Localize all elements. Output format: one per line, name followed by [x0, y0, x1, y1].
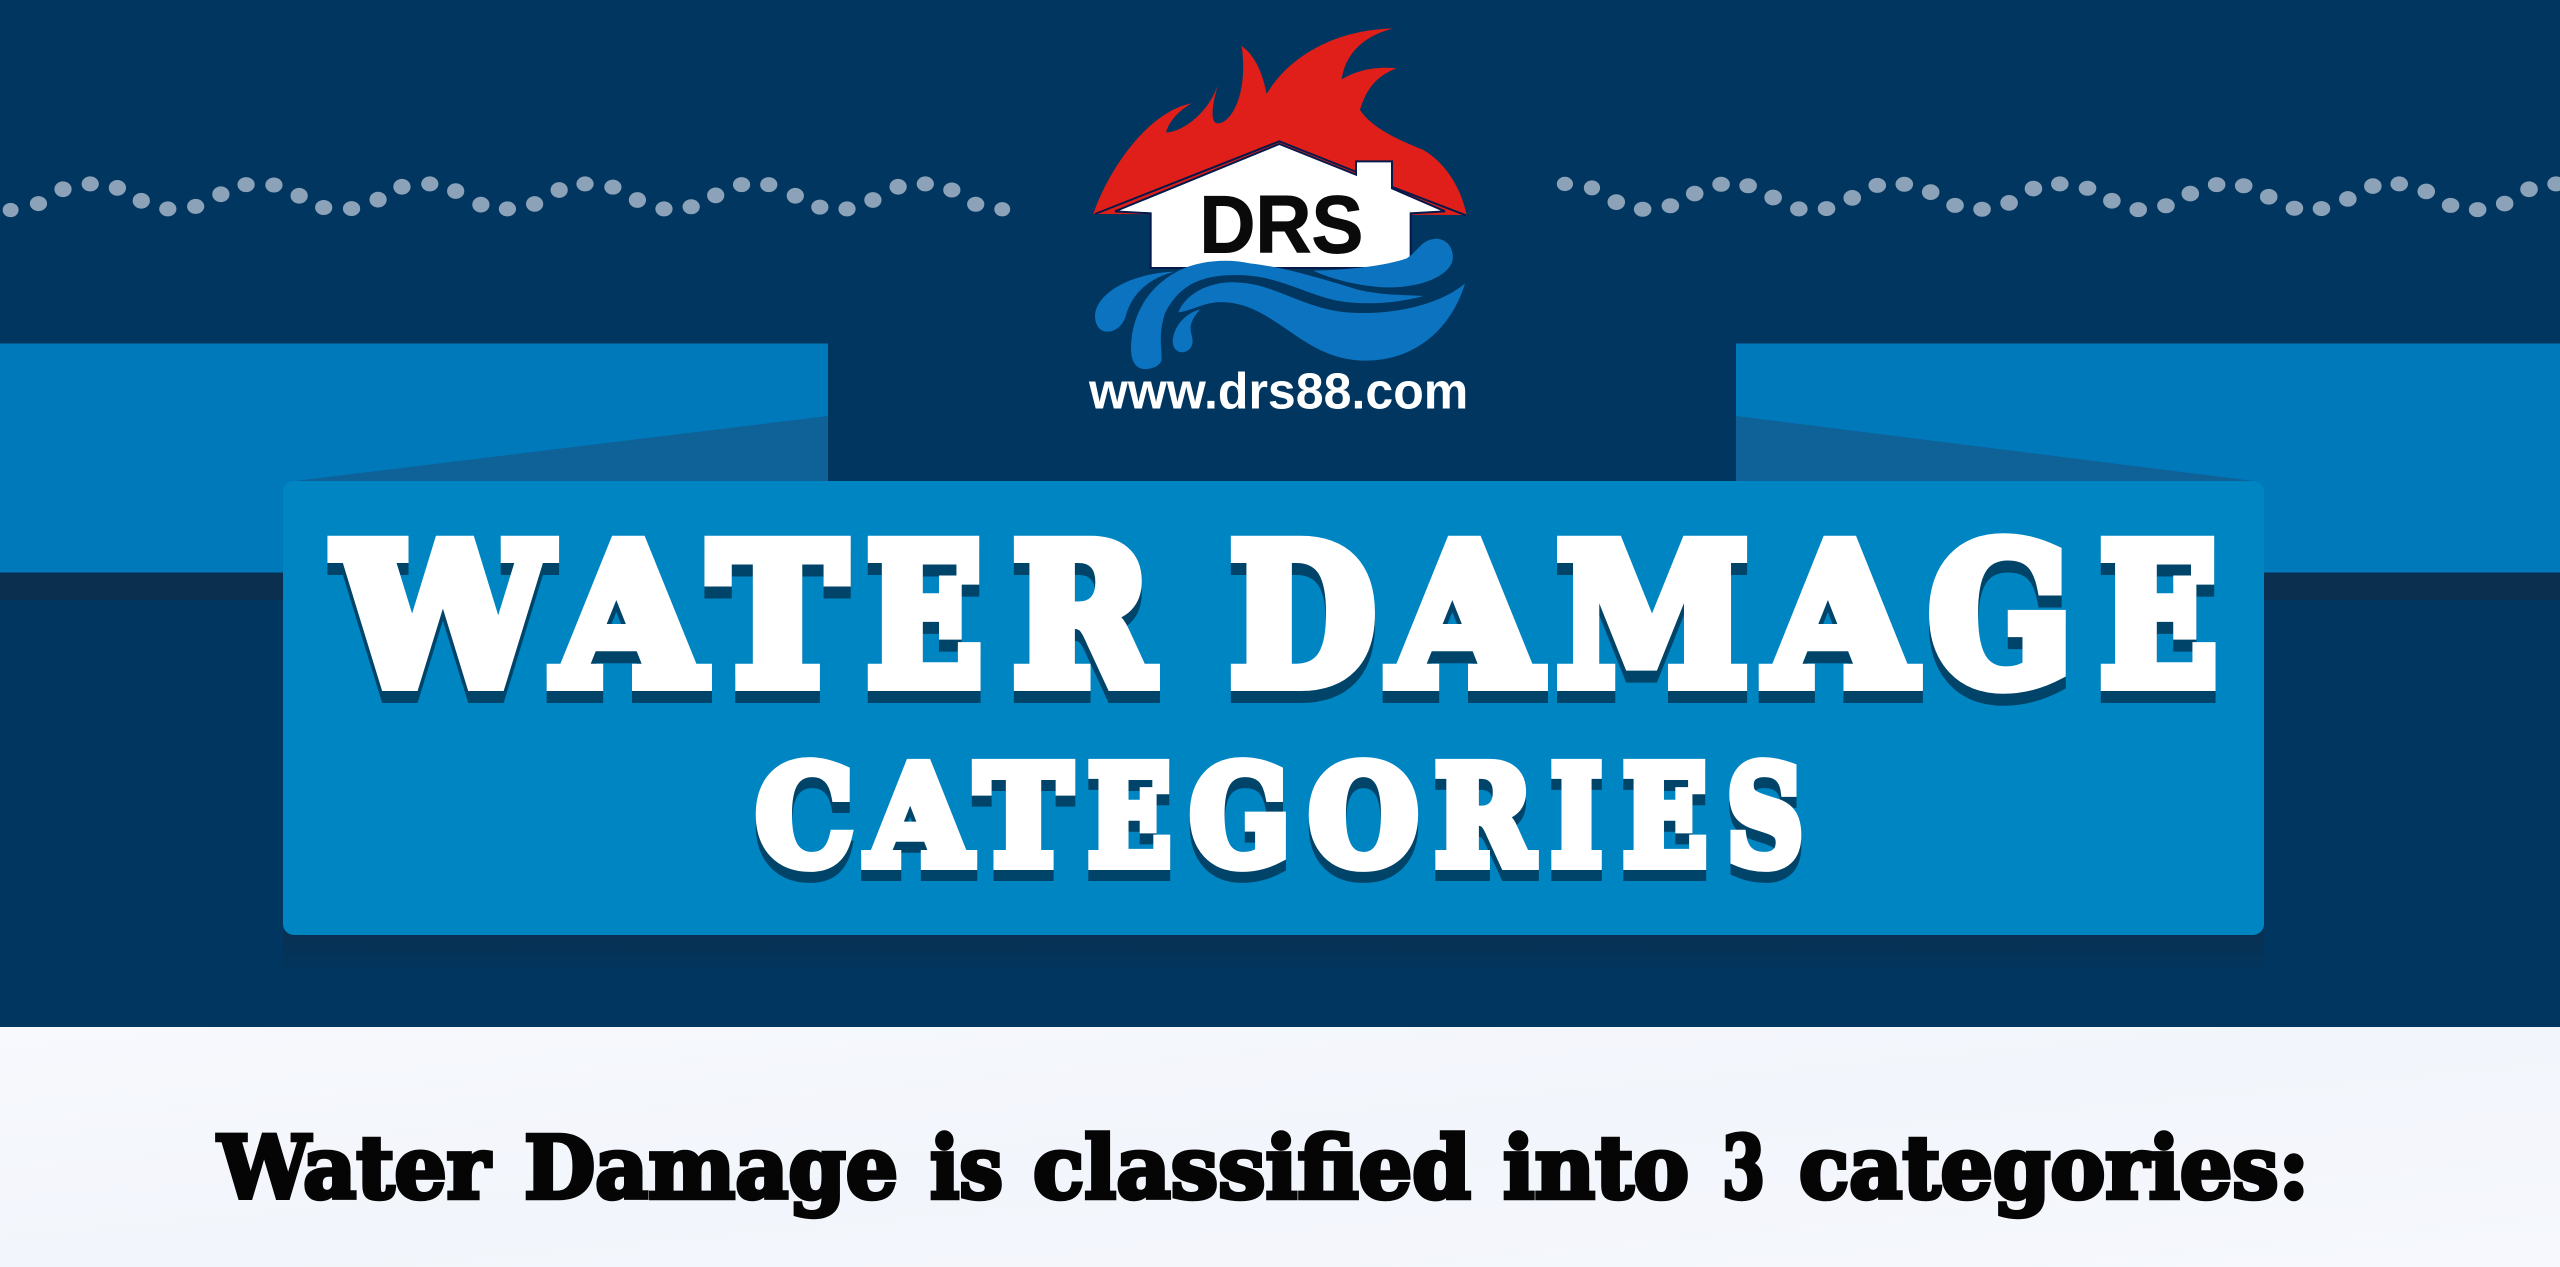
title: water damage: [335, 505, 2217, 741]
title: water damage: E: [2100, 517, 2217, 741]
ribbon left: [0, 344, 828, 600]
panel: title banner: [283, 481, 2264, 935]
title: water damage: E: [867, 505, 982, 729]
title: categories: R: [1435, 737, 1534, 897]
title: water damage: A: [1390, 517, 1541, 741]
wavy dotted line right: [1557, 177, 2560, 217]
subheading: categories:: [1799, 1118, 2309, 1219]
logo url: www.drs88.com: [1088, 362, 1468, 419]
title: categories: E: [1623, 737, 1707, 897]
logo: [1088, 28, 1468, 419]
title: categories: I: [1551, 737, 1602, 897]
title: water damage: R: [1013, 505, 1153, 729]
title: categories: C: [756, 737, 853, 897]
title: categories: R: [1435, 748, 1534, 908]
title: categories: E: [1623, 748, 1707, 908]
subheading: Water: [217, 1118, 492, 1219]
title: categories: O: [1309, 737, 1418, 897]
title: categories: S: [1727, 737, 1803, 897]
title: water damage: A: [554, 517, 705, 741]
title: categories: A: [866, 737, 972, 897]
subheading: classified: [1033, 1118, 1471, 1219]
icon: water waves: [1095, 239, 1465, 369]
roof outline: [1095, 141, 1466, 215]
subheading: Damage: [524, 1118, 898, 1219]
title: water damage: M: [1557, 505, 1748, 729]
title: water damage: T: [710, 505, 845, 729]
title: categories: E: [1088, 737, 1171, 897]
panel shadow: [283, 925, 2264, 968]
title: water damage: G: [1929, 517, 2072, 741]
title: categories: S: [1727, 748, 1803, 908]
title: water damage: W: [335, 517, 551, 741]
title: water damage: M: [1557, 517, 1748, 741]
title: categories: [756, 737, 1803, 908]
title: water damage: W: [335, 505, 551, 729]
panel: lower white section: [0, 1027, 2560, 1267]
icon: flame: [1093, 28, 1467, 215]
title: categories: E: [1088, 748, 1171, 908]
subheading: is: [930, 1118, 1003, 1219]
subheading: into: [1503, 1118, 1689, 1219]
title: water damage: A: [554, 505, 705, 729]
title: water damage: A: [1390, 505, 1541, 729]
logo text: DRS: DRS: [1199, 179, 1363, 270]
title: categories: G: [1190, 748, 1290, 908]
title: water damage: T: [710, 517, 845, 741]
title: water damage: G: [1929, 505, 2072, 729]
icon: house: [1115, 144, 1445, 268]
title: categories: A: [866, 748, 972, 908]
title: water damage: A: [1766, 505, 1916, 729]
subheading: 3: [1722, 1118, 1765, 1219]
ribbon right: [1736, 344, 2560, 600]
title: categories: I: [1551, 748, 1602, 908]
title: water damage: E: [2100, 505, 2217, 729]
title: water damage: D: [1230, 517, 1375, 741]
title: water damage: D: [1230, 505, 1375, 729]
title: categories: O: [1309, 748, 1418, 908]
title: categories: T: [976, 737, 1071, 897]
title: water damage: E: [867, 517, 982, 741]
title: water damage: R: [1013, 517, 1153, 741]
title: categories: C: [756, 748, 853, 908]
title: categories: T: [976, 748, 1071, 908]
title: water damage: A: [1766, 517, 1916, 741]
wavy dotted line left: [3, 177, 1010, 217]
title: categories: G: [1190, 737, 1290, 897]
